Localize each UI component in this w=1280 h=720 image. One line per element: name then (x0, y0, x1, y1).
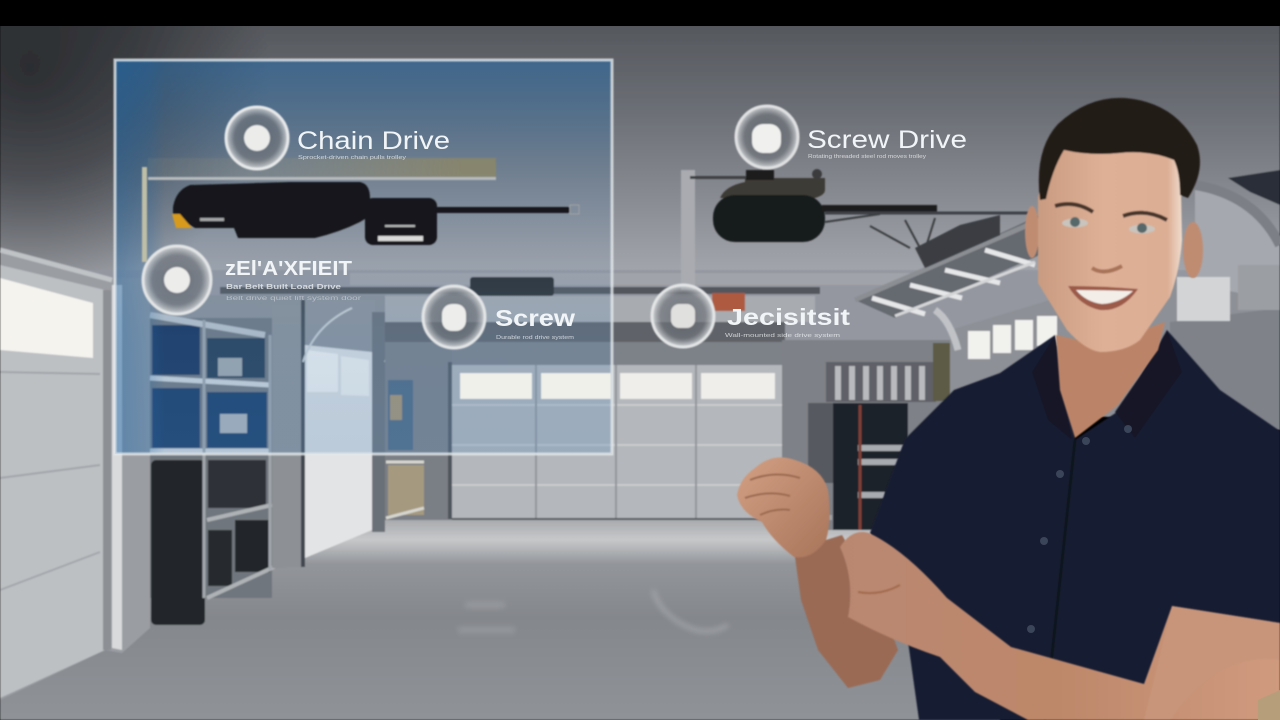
left caption lines: Bar Belt Built Load Drive (226, 284, 341, 291)
storage shelves (150, 315, 274, 625)
chain drive label: Chain Drive (297, 127, 450, 155)
right ceiling arch (1177, 170, 1280, 321)
smile (1068, 286, 1138, 310)
mounting rail (142, 158, 496, 262)
screw ring icon (423, 286, 485, 348)
screw caption: Durable rod drive system (496, 335, 575, 341)
face (1038, 140, 1182, 352)
chain drive opener (142, 158, 579, 262)
controller box (365, 198, 437, 245)
motor unit (713, 169, 825, 242)
jackshaft ring icon (652, 285, 714, 347)
ears (1025, 206, 1203, 278)
screw drive opener (681, 169, 1030, 290)
left wall with side garage door (0, 248, 150, 700)
chain drive caption: Sprocket-driven chain pulls trolley (298, 155, 406, 161)
screw drive ring icon (736, 106, 798, 168)
ceiling track ladder (855, 215, 1040, 318)
screw rail and struts (822, 205, 1030, 268)
drive rod (435, 205, 579, 214)
glass overlay panel (115, 60, 612, 454)
screw label: Screw (495, 305, 575, 331)
node: screw (423, 286, 575, 348)
left garbled label: zEl'A'XFIEIT (225, 258, 352, 280)
left ring icon (143, 246, 211, 314)
hair (1039, 98, 1200, 200)
node: screw drive (736, 106, 967, 168)
side door (303, 300, 425, 567)
back wall and rear garage door (385, 340, 815, 520)
pillar (272, 305, 303, 568)
corner object (1258, 690, 1280, 720)
node: chain drive (226, 107, 450, 169)
node: jackshaft (652, 285, 850, 347)
ceiling (0, 25, 1280, 350)
mounting bracket (681, 170, 750, 290)
floor (0, 515, 1000, 720)
jackshaft label: Jecisitsit (727, 304, 850, 330)
floor marks (458, 590, 728, 631)
horizontal rail beam (220, 273, 910, 342)
shirt buttons (1027, 425, 1132, 633)
pointing hand and forearm (840, 532, 1280, 720)
raised arm and hand (737, 457, 898, 688)
neck (1056, 322, 1165, 438)
motor unit (172, 182, 370, 238)
chain drive ring icon (226, 107, 288, 169)
right side wall with windows (935, 260, 1280, 430)
left caption lines: Belt drive quiet lift system door (226, 296, 361, 302)
head (1025, 98, 1203, 352)
eyes (1062, 217, 1155, 234)
presenter (737, 98, 1280, 720)
upper shelf wall (150, 295, 385, 345)
top black band (0, 0, 1280, 26)
shirt (870, 330, 1280, 720)
right rear rack (782, 340, 952, 530)
node: left garbled (143, 246, 361, 314)
jackshaft caption: Wall-mounted side drive system (725, 333, 841, 339)
rear storage (385, 340, 452, 520)
nose (1092, 266, 1122, 272)
left caption lines (226, 284, 361, 302)
eyebrows (1055, 204, 1167, 220)
garage door windows seen through panel (460, 373, 775, 399)
screw drive caption: Rotating threaded steel rod moves trolley (808, 154, 926, 160)
screw drive label: Screw Drive (807, 126, 967, 154)
